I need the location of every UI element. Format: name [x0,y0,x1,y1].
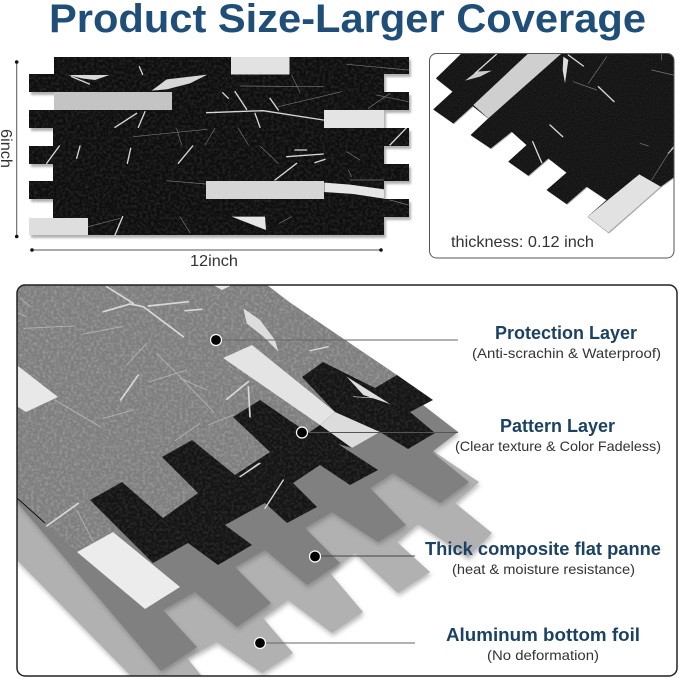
callout: protection layer [210,323,661,361]
layer: protection film [17,285,397,552]
panel background [430,54,674,258]
edge line [17,498,45,523]
layer: black pattern [90,362,435,565]
callout: composite panel: Thick composite flat panne [425,539,661,559]
callout: protection layer: (Anti-scrachin & Waterproof) [472,345,661,361]
angled tile corner [433,53,677,233]
marble veins left [18,287,258,542]
tile sheet body [29,57,409,235]
dimension: height [0,60,18,238]
panel border [430,54,674,258]
thickness label: thickness: 0.12 inch [451,234,594,251]
pattern layer white brick [320,412,380,448]
exploded layers [17,285,492,678]
lower white brick [77,532,180,609]
callout: aluminum foil: (No deformation) [487,647,599,663]
top white fragment [214,286,231,290]
left white brick [18,366,58,412]
callout: protection layer: Protection Layer [495,323,637,343]
panel: thickness close-up [430,53,677,258]
panel border [17,285,677,676]
callout: composite panel: (heat & moisture resistance) [452,561,635,577]
metallic white bricks [29,57,384,235]
protection white brick [223,345,335,425]
leather texture [29,57,409,235]
dimension: width [30,248,383,270]
callout: pattern layer [296,416,661,454]
marble veins [47,64,408,235]
marble veins right [240,308,390,508]
callout: pattern layer: Pattern Layer [500,416,615,436]
panel: front view of tile sheet [29,57,409,235]
callout: aluminum foil [254,625,640,663]
callout: aluminum foil: Aluminum bottom foil [446,625,640,645]
dimension: width: 12inch [190,253,238,270]
layer: aluminum foil [18,451,494,676]
callout: pattern layer: (Clear texture & Color Fadeless) [455,438,661,454]
panel: layer structure [17,285,677,678]
callout: composite panel [310,539,661,577]
layer: composite panel [17,285,469,671]
